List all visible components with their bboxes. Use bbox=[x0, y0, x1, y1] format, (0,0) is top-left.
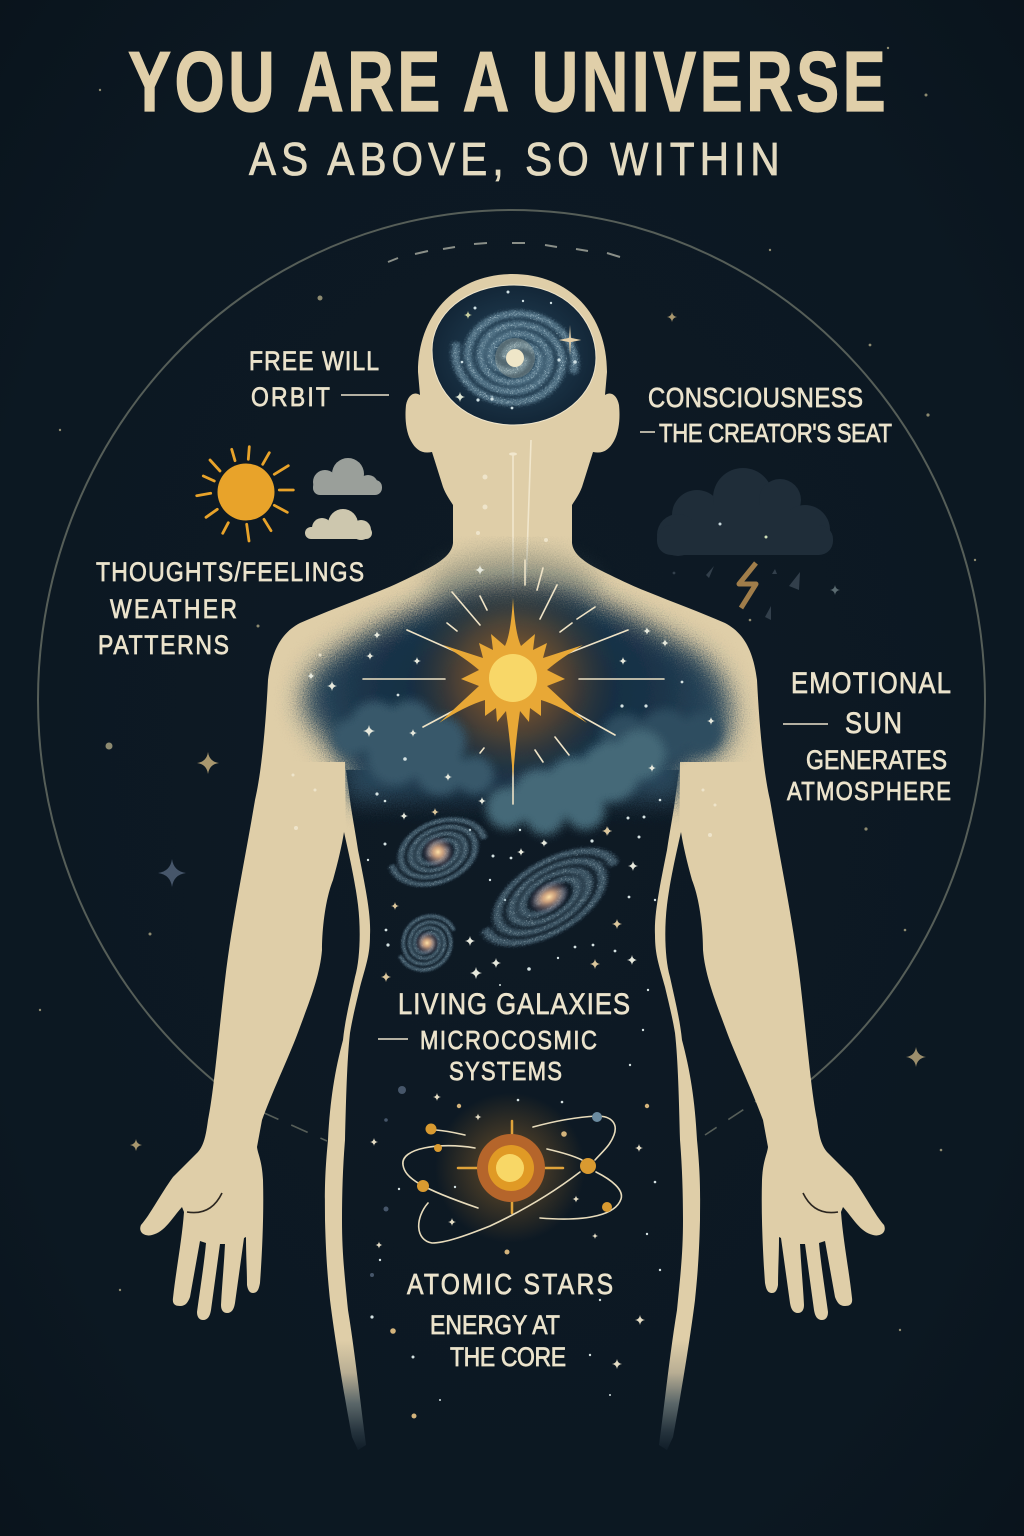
label: living galaxies: MICROCOSMIC bbox=[420, 1026, 597, 1055]
background stars bbox=[39, 47, 976, 1331]
body silhouette bbox=[140, 274, 885, 1450]
torso stars bbox=[292, 474, 716, 991]
label: free will orbit: FREE WILL bbox=[249, 346, 379, 376]
chest clouds bbox=[333, 700, 722, 835]
head galaxy bbox=[432, 285, 596, 425]
subtitle: AS ABOVE, SO WITHIN bbox=[249, 135, 780, 186]
label: emotional sun: ATMOSPHERE bbox=[787, 777, 951, 806]
label: atomic stars: ENERGY AT bbox=[430, 1310, 560, 1340]
label: free will orbit: ORBIT bbox=[251, 382, 330, 412]
label: living galaxies: SYSTEMS bbox=[449, 1057, 562, 1086]
galaxy three bbox=[389, 907, 465, 979]
sun glow bbox=[408, 573, 618, 783]
palm crease left bbox=[187, 1193, 222, 1213]
title: YOU ARE A UNIVERSE bbox=[128, 34, 886, 129]
label: consciousness bbox=[640, 381, 892, 448]
chest nebula bbox=[303, 552, 732, 800]
spine lines bbox=[509, 440, 531, 600]
chest sun bbox=[363, 560, 664, 804]
label: atomic stars bbox=[407, 1268, 613, 1372]
label: consciousness: CONSCIOUSNESS bbox=[648, 381, 863, 413]
icon: cream cloud bbox=[305, 509, 372, 540]
label: thoughts and feelings bbox=[96, 557, 364, 660]
label: consciousness: THE CREATOR'S SEAT bbox=[659, 419, 892, 448]
atom orbit system bbox=[403, 1093, 621, 1243]
galaxy two bbox=[471, 834, 629, 960]
orbit circle bbox=[38, 210, 985, 1141]
palm crease right bbox=[803, 1193, 838, 1213]
label: thoughts and feelings: PATTERNS bbox=[98, 630, 229, 660]
lower torso stars bbox=[370, 1029, 661, 1418]
label: emotional sun bbox=[783, 666, 951, 806]
label: atomic stars: ATOMIC STARS bbox=[407, 1268, 613, 1300]
label: emotional sun: EMOTIONAL bbox=[791, 666, 951, 699]
icon: weather sun bbox=[197, 447, 293, 541]
label: emotional sun: SUN bbox=[845, 706, 902, 739]
icon: storm cloud bbox=[657, 468, 833, 620]
icon: grey cloud bbox=[313, 458, 382, 495]
label: living galaxies: LIVING GALAXIES bbox=[398, 987, 630, 1020]
label: thoughts and feelings: WEATHER bbox=[110, 594, 237, 624]
galaxy one bbox=[383, 809, 493, 895]
label: free will orbit bbox=[249, 346, 389, 412]
label: thoughts and feelings: THOUGHTS/FEELINGS bbox=[96, 557, 364, 587]
label: atomic stars: THE CORE bbox=[450, 1342, 566, 1372]
label: emotional sun: GENERATES bbox=[806, 745, 947, 775]
label: living galaxies bbox=[378, 987, 630, 1086]
